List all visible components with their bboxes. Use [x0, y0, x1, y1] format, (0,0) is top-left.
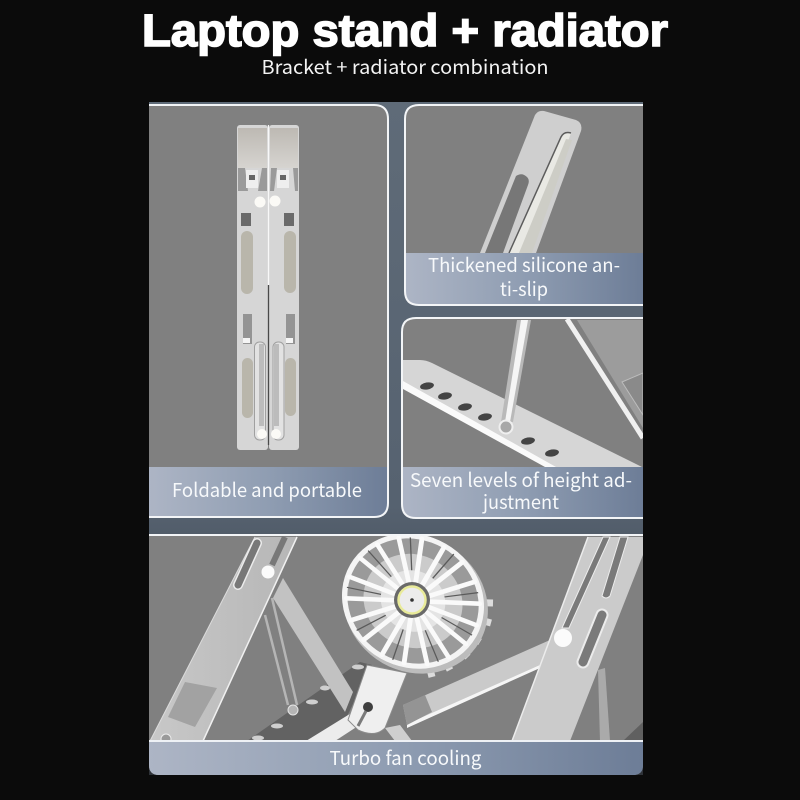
caption: silicone: Thickened silicone an-: [428, 251, 620, 278]
icon: perforated base: [247, 662, 372, 741]
icon: perforated rail: [403, 360, 642, 467]
icon: diagonal strut: [273, 578, 353, 712]
icon: right cross bar: [385, 640, 550, 741]
caption: silicone: [428, 251, 620, 302]
icon: left upright: [150, 537, 297, 744]
caption: height: Seven levels of height ad-: [410, 466, 632, 493]
icon: folded stand: [237, 125, 299, 450]
caption bar: [402, 467, 643, 518]
icon: turbo fan: [342, 536, 494, 678]
slate backing panel: [149, 102, 643, 775]
icon: back plate: [567, 319, 643, 438]
caption bar: [405, 253, 643, 305]
caption: silicone: ti-slip: [500, 275, 548, 302]
caption bar: [149, 741, 643, 775]
panel: turbo fan cooling: [149, 508, 643, 775]
panel: foldable and portable: [149, 105, 388, 517]
subtitle: Bracket + radiator combination: [262, 53, 548, 80]
caption: height: justment: [482, 488, 559, 515]
icon: fan arm: [348, 665, 407, 734]
icon: support rod: [500, 320, 531, 434]
caption: foldable: Foldable and portable: [172, 476, 362, 503]
caption: turbo fan: Turbo fan cooling: [330, 744, 482, 771]
panel: seven levels of height: [402, 318, 643, 518]
title: Laptop stand + radiator: [142, 5, 668, 56]
icon: thin rods: [265, 598, 297, 705]
caption: height: [410, 466, 632, 515]
icon: stand arm: [480, 111, 581, 253]
icon: right upright: [512, 537, 643, 741]
panel: silicone anti-slip: [405, 105, 643, 305]
caption bar: [149, 467, 388, 517]
